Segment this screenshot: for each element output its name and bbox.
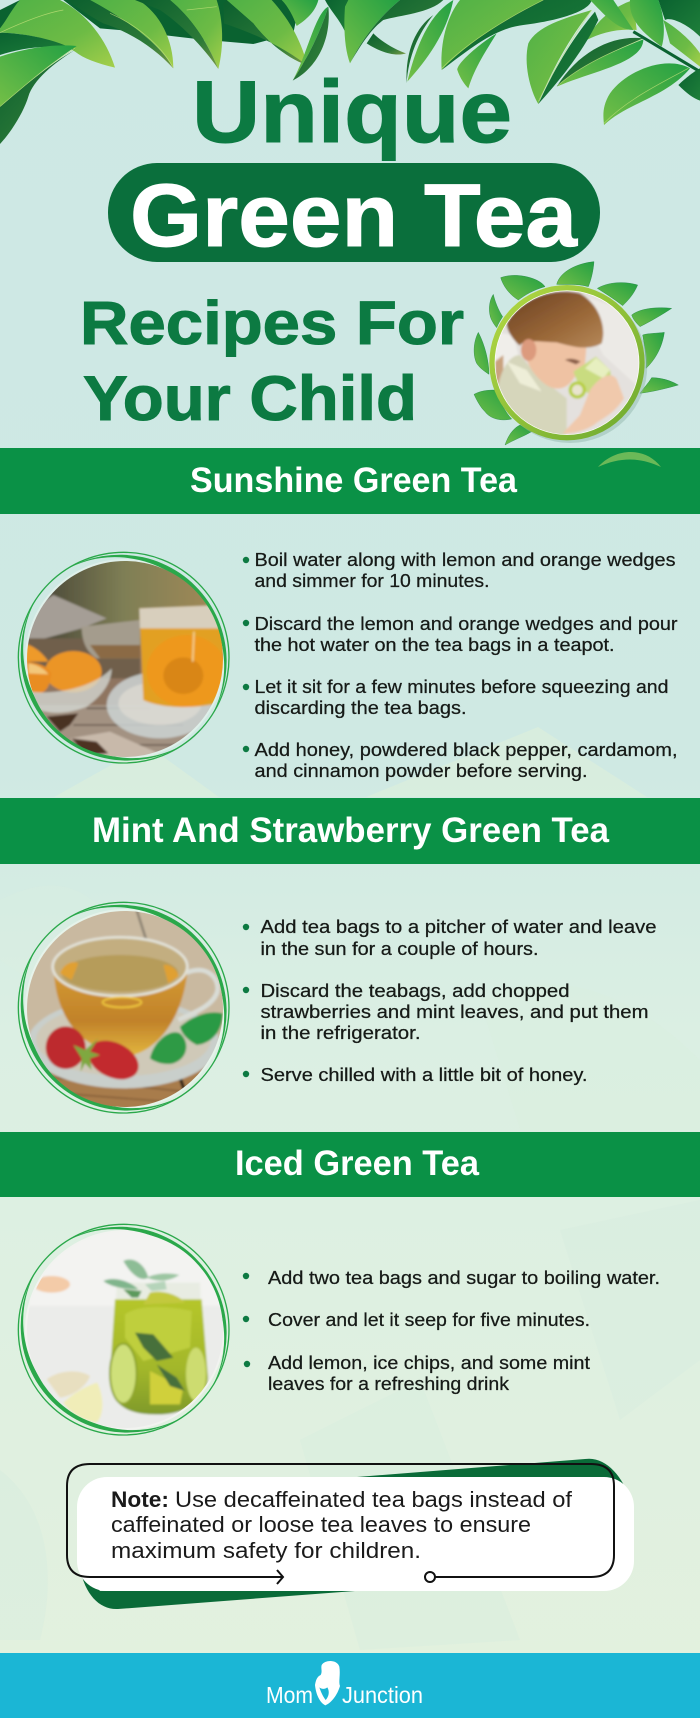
left leaf cluster	[0, 0, 350, 144]
title line: Recipes For: Recipes For	[80, 289, 464, 357]
step 1: Boil water along with lemon and orange wedges	[254, 549, 676, 570]
glass bowl	[30, 668, 112, 713]
saucer	[27, 998, 219, 1088]
callout accent: dark green swooshes	[80, 1459, 631, 1609]
muddled mint	[135, 1333, 173, 1361]
step 2	[243, 613, 678, 655]
logo: MomJunction	[266, 1661, 423, 1708]
footer band	[0, 1653, 700, 1718]
heading band: Sunshine Green Tea	[0, 448, 700, 514]
heading band: Mint And Strawberry Green Tea: Mint And Strawberry Green Tea	[92, 811, 610, 850]
step 3: discarding the tea bags.	[254, 697, 466, 718]
note text: Use decaffeinated tea bags instead of	[175, 1487, 573, 1512]
photo: child drinking from a green cup with leaves	[474, 262, 678, 445]
face and neck	[526, 340, 588, 390]
step 2: the hot water on the tea bags in a teapot.	[254, 634, 614, 655]
title pill: Green Tea: Green Tea	[130, 165, 579, 265]
glass of tea	[139, 627, 223, 708]
orange slices	[45, 651, 102, 692]
title	[80, 62, 600, 434]
heading band: Iced Green Tea: Iced Green Tea	[235, 1144, 480, 1183]
panel: Iced Green Tea	[0, 1132, 700, 1436]
step 3	[243, 676, 669, 718]
photo: iced green tea glass with lime and mint	[18, 1224, 229, 1436]
lime slices	[110, 1344, 137, 1404]
bullet list: Mint and strawberry steps	[243, 916, 657, 1085]
panel: Mint And Strawberry Green Tea	[0, 798, 700, 1115]
background pattern: pale shapes	[0, 727, 700, 1650]
note text: Note:	[111, 1487, 169, 1512]
step 1: and simmer for 10 minutes.	[254, 570, 490, 591]
heading band: Mint And Strawberry Green Tea	[0, 798, 700, 864]
ear	[521, 339, 536, 361]
step 4	[243, 739, 678, 781]
lemon pieces	[47, 1371, 90, 1398]
strawberries	[46, 1026, 86, 1069]
logo: MomJunction: Junction	[342, 1682, 423, 1708]
saucer	[107, 672, 213, 738]
title line: Your Child: Your Child	[83, 364, 417, 434]
photo: tea with orange slices	[18, 552, 229, 765]
cup	[573, 356, 612, 394]
note text: caffeinated or loose tea leaves to ensure	[111, 1512, 531, 1537]
hair	[507, 291, 603, 348]
callout: note	[67, 1459, 634, 1609]
step 1: in the sun for a couple of hours.	[260, 938, 538, 959]
note text	[111, 1487, 573, 1563]
step 2: Cover and let it seep for five minutes.	[268, 1309, 590, 1330]
step 1: Add two tea bags and sugar to boiling water.	[268, 1267, 660, 1288]
glass rim	[116, 1283, 200, 1300]
drink	[110, 1299, 208, 1415]
step 4: and cinnamon powder before serving.	[254, 760, 588, 781]
logo: MomJunction: Mom	[266, 1682, 313, 1708]
step 3: Add lemon, ice chips, and some mint	[268, 1352, 590, 1373]
step 3: leaves for a refreshing drink	[268, 1373, 510, 1394]
callout outline with arrow	[67, 1464, 614, 1584]
heading band: Sunshine Green Tea: Sunshine Green Tea	[190, 461, 518, 500]
photo: tea cup with strawberries and mint	[18, 902, 229, 1115]
title line: Unique: Unique	[192, 62, 512, 161]
step 2: Discard the lemon and orange wedges and pour	[254, 613, 678, 634]
step 3: Serve chilled with a little bit of honey.	[260, 1064, 588, 1085]
step 2: Discard the teabags, add chopped	[260, 980, 570, 1001]
hand	[563, 375, 624, 434]
panel: Sunshine Green Tea	[0, 448, 700, 781]
bullet list: Sunshine steps	[243, 549, 678, 781]
step 2	[243, 980, 649, 1043]
step 2: in the refrigerator.	[260, 1022, 420, 1043]
step 3	[244, 1352, 590, 1394]
mint sprig	[123, 1260, 148, 1279]
mint leaves	[150, 1032, 186, 1064]
shirt	[498, 355, 567, 435]
leaves around the portrait	[474, 262, 678, 445]
right leaf cluster	[344, 0, 700, 125]
cup and tea	[54, 970, 187, 1055]
star anise	[47, 713, 78, 732]
step 2: strawberries and mint leaves, and put them	[260, 1001, 648, 1022]
top foliage: tea leaves	[0, 0, 700, 144]
step 3: Let it sit for a few minutes before squeezing and	[254, 676, 668, 697]
bullet list: Iced tea steps	[243, 1267, 660, 1394]
step 1: Add tea bags to a pitcher of water and leave	[260, 916, 656, 937]
step 1	[243, 549, 676, 591]
note text: maximum safety for children.	[111, 1538, 421, 1563]
heading band: Iced Green Tea	[0, 1132, 700, 1197]
step 1	[243, 916, 657, 959]
logo figure: mother and child	[315, 1661, 340, 1705]
step 4: Add honey, powdered black pepper, cardamom,	[254, 739, 678, 760]
cup handle	[178, 970, 218, 1020]
